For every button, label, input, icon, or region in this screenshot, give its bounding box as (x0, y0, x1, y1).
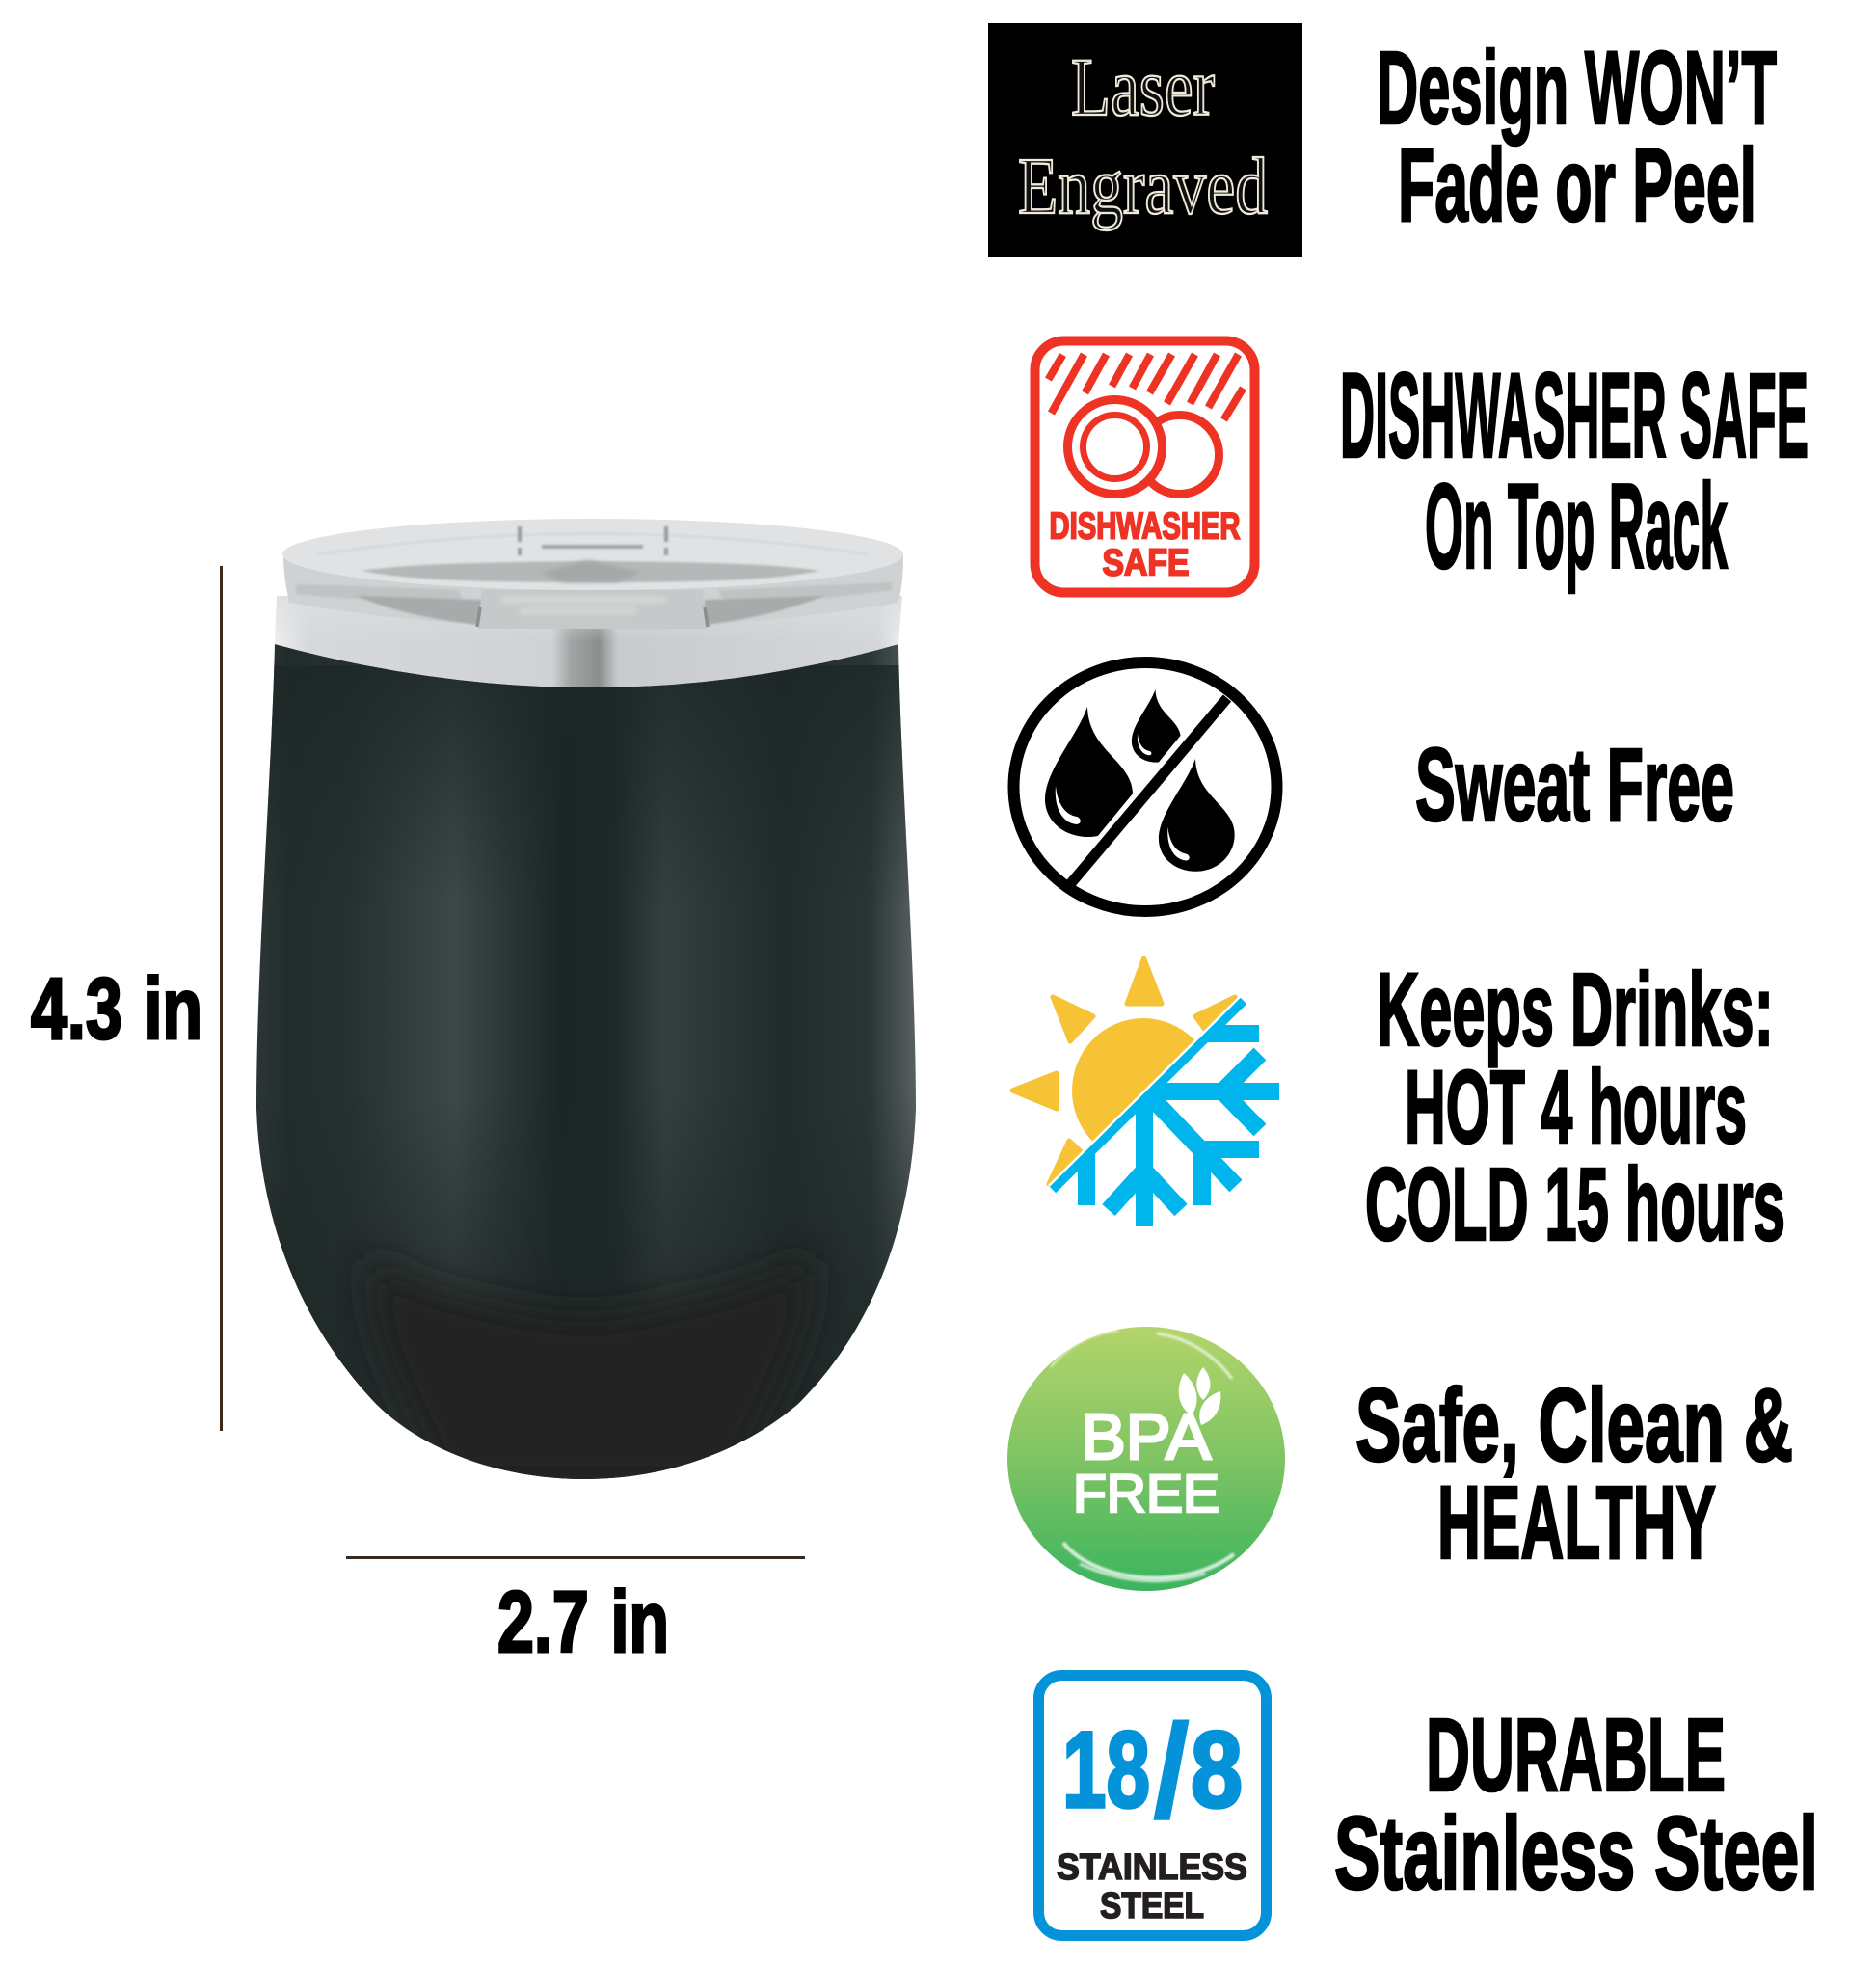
feature text: durable stainless steel (1334, 1696, 1818, 1911)
icon: 18/8 stainless steel: STAINLESS (1057, 1847, 1247, 1888)
icon: bpa free (1007, 1327, 1285, 1591)
icon: leaves (1179, 1367, 1220, 1425)
icon: 18/8 stainless steel: 8 (1191, 1710, 1243, 1830)
height dimension line (220, 566, 223, 1431)
tumbler body (251, 644, 925, 1495)
width dimension line (346, 1556, 805, 1559)
width label: 2.7 in (497, 1575, 669, 1671)
height label: 4.3 in (31, 961, 202, 1058)
icon: bpa free: BPA (1081, 1401, 1211, 1473)
feature text: dishwasher safe (1340, 349, 1809, 594)
icon: laser engraved badge: Engraved (1018, 142, 1268, 231)
tumbler product photo (251, 519, 925, 1495)
icon: sweat free (1014, 662, 1276, 911)
icon: dishwasher safe: DISHWASHER (1049, 505, 1240, 548)
feature text: safe clean healthy (1355, 1366, 1793, 1580)
icon: 18/8 stainless steel: 18 (1062, 1710, 1150, 1830)
icon: dishwasher safe (1035, 341, 1255, 592)
icon: 18/8 stainless steel (1039, 1676, 1267, 1936)
icon: laser engraved badge: Laser (1071, 40, 1215, 133)
icon: 18/8 stainless steel: / (1152, 1695, 1191, 1846)
icon: dishwasher safe: SAFE (1103, 542, 1190, 584)
icon: bpa free: FREE (1073, 1463, 1219, 1523)
feature text: keeps drinks (1365, 951, 1785, 1262)
feature text: fade or peel (1377, 29, 1777, 243)
stainless steel band (275, 596, 902, 687)
icon: laser engraved badge (988, 23, 1302, 257)
clear lid (282, 519, 903, 629)
icon: hot and cold sun snowflake (1012, 958, 1279, 1226)
icon: 18/8 stainless steel: STEEL (1100, 1886, 1204, 1926)
